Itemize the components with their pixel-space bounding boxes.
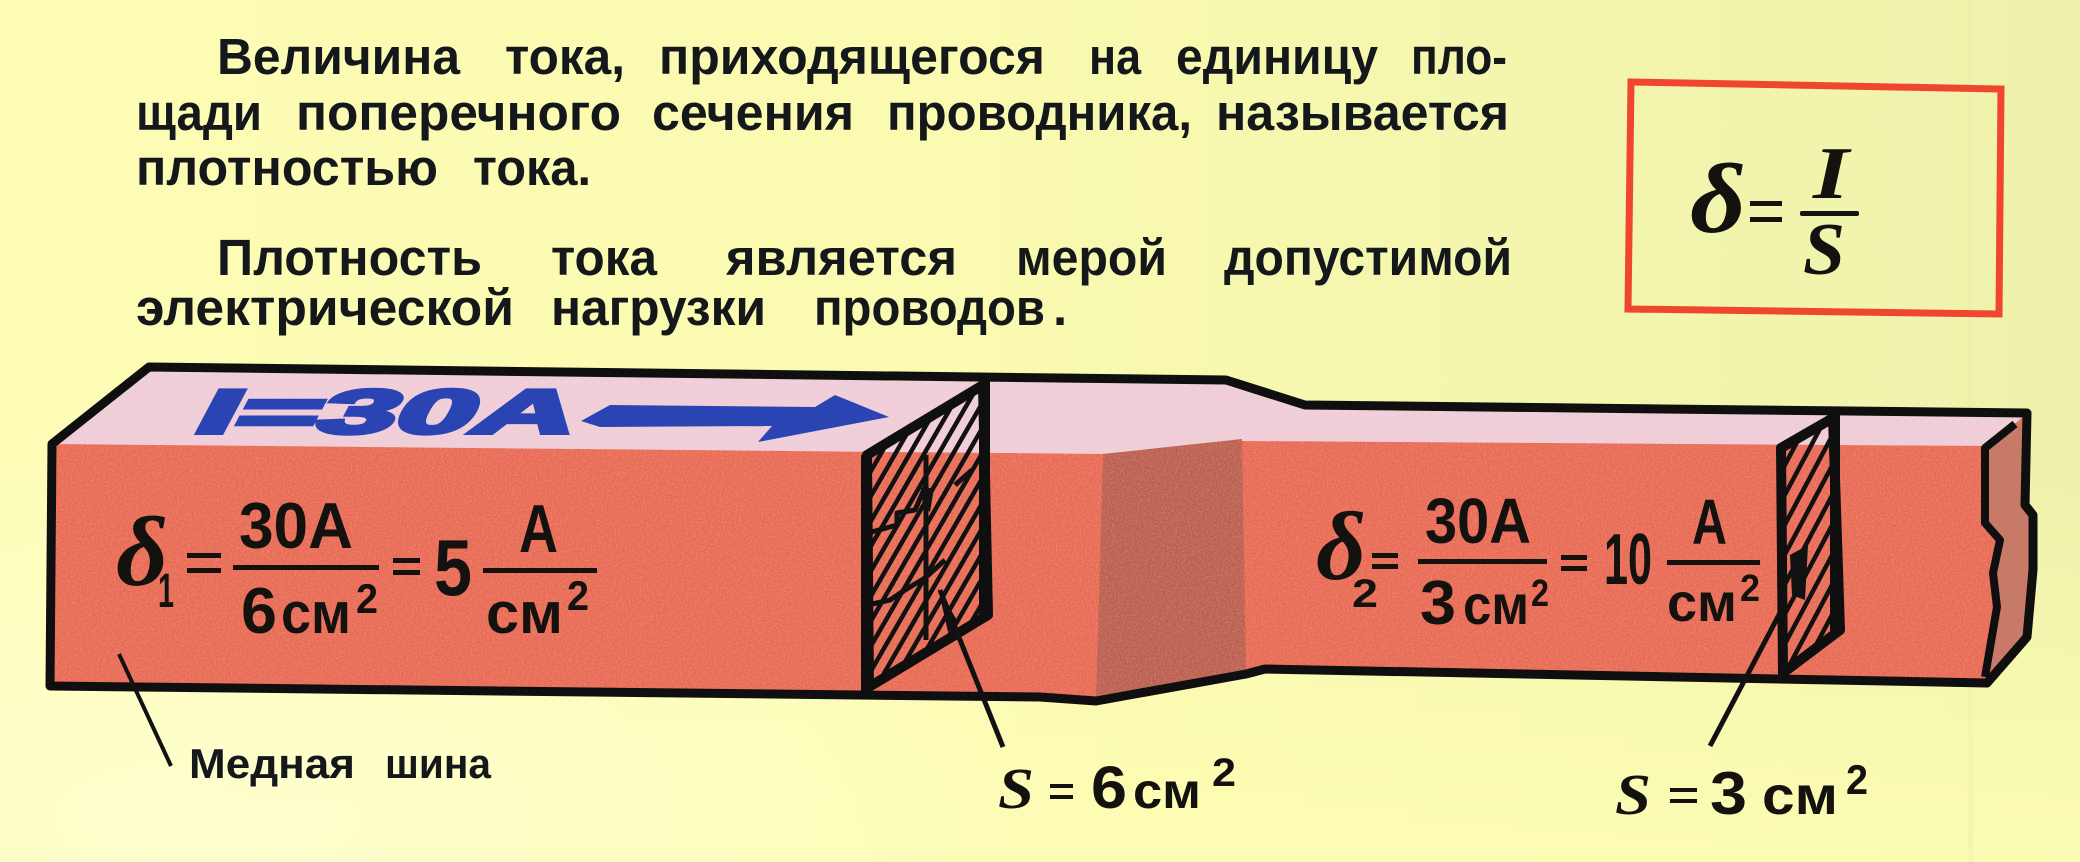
text: current density as a measure of load: допустимой bbox=[1224, 229, 1512, 286]
text: current density as a measure of load: является bbox=[725, 229, 957, 286]
cross-section S1 bbox=[861, 376, 990, 691]
label: S = 3 cm2: 2 bbox=[1846, 756, 1868, 803]
text: current density as a measure of load: электрической bbox=[136, 279, 514, 336]
text: definition of current density: на bbox=[1089, 28, 1142, 85]
label: S = 6 cm2: 6 bbox=[1091, 754, 1127, 821]
label: S = 6 cm2: S bbox=[998, 756, 1034, 821]
formula: delta 1: см bbox=[486, 581, 563, 646]
formula box: delta = I / S bbox=[1628, 82, 2001, 314]
text: definition of current density: тока, bbox=[505, 28, 625, 85]
leader line: S1 bbox=[938, 588, 1003, 747]
arrow: current direction bbox=[581, 395, 889, 442]
text: current density as a measure of load: . bbox=[1053, 279, 1067, 336]
label: S = 6 cm2: 2 bbox=[1212, 751, 1236, 795]
label: S = 3 cm2 bbox=[1615, 611, 1868, 827]
bar end face bbox=[1985, 423, 2029, 677]
text: current density as a measure of load: Плотность bbox=[217, 229, 482, 286]
formula: delta 2 bbox=[1316, 485, 1760, 638]
text: definition of current density: пло- bbox=[1411, 28, 1507, 85]
current label: I=30A with arrow: I=30A bbox=[183, 378, 597, 447]
text: definition of current density: поперечного bbox=[296, 84, 621, 141]
label: S = 6 cm2: см bbox=[1133, 763, 1201, 819]
grain texture bbox=[54, 418, 2022, 696]
bar outline bbox=[50, 367, 2033, 701]
formula box: delta = I / S: δ bbox=[1690, 143, 1746, 254]
label: S = 3 cm2: см bbox=[1762, 766, 1838, 826]
formula: delta 1: 30А bbox=[239, 489, 353, 562]
text: definition of current density: единицу bbox=[1176, 28, 1379, 85]
formula box: delta = I / S: S bbox=[1803, 209, 1845, 291]
formula: delta 2: 10 bbox=[1604, 520, 1652, 600]
formula: delta 2: 2 bbox=[1352, 572, 1378, 616]
shaded transition section bbox=[1096, 439, 1246, 701]
formula: delta 1: см bbox=[281, 581, 351, 646]
formula box: delta = I / S: I bbox=[1812, 133, 1852, 215]
cross-section S2 bbox=[1781, 410, 1840, 673]
formula: delta 2: 30А bbox=[1425, 485, 1531, 557]
current label: I=30A with arrow bbox=[183, 378, 889, 447]
label: copper bus: шина bbox=[385, 740, 492, 787]
text: definition of current density: называется bbox=[1216, 84, 1509, 141]
text: definition of current density: приходящегося bbox=[659, 28, 1045, 85]
formula: delta 2: 2 bbox=[1531, 573, 1549, 615]
formula: delta 2: см bbox=[1463, 573, 1529, 636]
formula: delta 2: 3 bbox=[1420, 569, 1456, 638]
copper bus bar bbox=[40, 360, 2040, 705]
formula: delta 1: 1 bbox=[158, 565, 174, 618]
text: definition of current density: сечения bbox=[652, 84, 854, 141]
bar top face bbox=[52, 367, 2027, 454]
leader line: S2 bbox=[1710, 611, 1781, 746]
bar end break line bbox=[1985, 424, 2015, 677]
text: definition of current density: Величина bbox=[217, 28, 461, 85]
formula: delta 2: см bbox=[1667, 573, 1737, 633]
bar side face bbox=[50, 367, 2033, 701]
label: S = 3 cm2: 3 bbox=[1710, 760, 1747, 827]
text: definition of current density: тока. bbox=[473, 139, 591, 196]
text: definition of current density: щади bbox=[136, 84, 262, 141]
text: current density as a measure of load: нагрузки bbox=[551, 279, 766, 336]
text: current density as a measure of load bbox=[136, 229, 1512, 336]
text: definition of current density: плотностью bbox=[136, 139, 438, 196]
label: S = 6 cm2 bbox=[938, 588, 1236, 821]
formula: delta 1: А bbox=[519, 491, 558, 567]
label: copper bus: Медная bbox=[189, 740, 355, 787]
text: current density as a measure of load: проводов bbox=[814, 279, 1045, 336]
formula: delta 2: А bbox=[1692, 486, 1727, 558]
text: current density as a measure of load: мерой bbox=[1016, 229, 1167, 286]
formula: delta 1: 2 bbox=[356, 575, 378, 622]
formula: delta 1: 6 bbox=[241, 574, 277, 647]
formula: delta 1 bbox=[116, 489, 597, 647]
text: definition of current density: проводника, bbox=[887, 84, 1192, 141]
formula: delta 1: 2 bbox=[567, 572, 589, 619]
formula: delta 2: δ bbox=[1316, 493, 1366, 601]
leader line: copper bus bbox=[119, 654, 171, 766]
label: copper bus bbox=[119, 654, 492, 787]
formula: delta 1: δ bbox=[116, 496, 168, 607]
text: definition of current density bbox=[136, 28, 1509, 196]
formula: delta 1: 5 bbox=[434, 523, 472, 612]
label: S = 3 cm2: S bbox=[1615, 762, 1651, 827]
text: current density as a measure of load: тока bbox=[551, 229, 658, 286]
formula: delta 2: 2 bbox=[1740, 568, 1760, 610]
